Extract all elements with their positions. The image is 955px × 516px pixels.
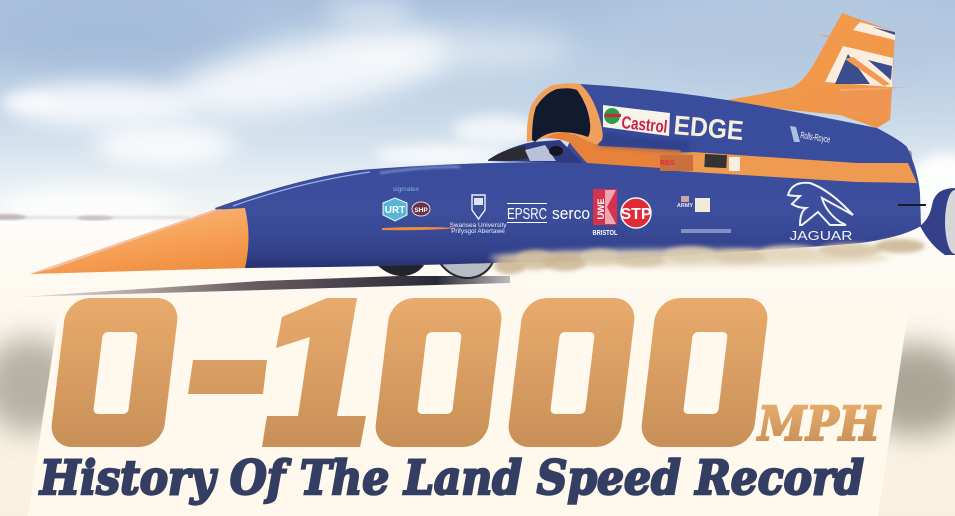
Castrol badge: Castrol (621, 112, 668, 137)
EPSRC logo: EPSRC (507, 206, 547, 223)
pod lower shading (597, 132, 690, 152)
EPSRC logo (507, 203, 547, 223)
Castrol badge (603, 105, 670, 137)
digit 1: 1 (248, 230, 382, 498)
distant mountains (0, 214, 190, 220)
SHP logo: SHP (414, 207, 428, 214)
hyphen: - (191, 242, 265, 488)
digit 0: 0 (377, 253, 499, 499)
car shadow on ground (20, 276, 510, 297)
intake rim (527, 83, 603, 145)
rear suspension and wheel (898, 188, 955, 255)
title: 0-1000 (52, 298, 768, 447)
digit 0 (642, 298, 768, 447)
small sponsor logos (677, 196, 731, 233)
Rolls-Royce logo (790, 126, 831, 146)
clouds (0, 0, 955, 223)
digit 0 (376, 298, 502, 447)
UWE Bristol logo: UWE (596, 198, 606, 220)
intake opening (532, 88, 590, 142)
serco logo: serco (552, 204, 590, 223)
STP logo (620, 198, 652, 228)
cream title panel (28, 298, 909, 516)
stripe sponsors: RBS (660, 160, 675, 167)
nozzle (902, 150, 912, 170)
cockpit canopy (488, 140, 583, 163)
sigmatex logo: sigmatex (393, 186, 420, 193)
Swansea University logo (449, 195, 507, 235)
Swansea University logo: Prifysgol Abertawe (451, 228, 505, 235)
digit 0: 0 (510, 253, 632, 499)
orange under-duct (545, 132, 690, 170)
UWE Bristol logo (592, 189, 618, 237)
digit 0: 0 (44, 253, 166, 499)
wheels (377, 262, 493, 278)
orange stripe (660, 152, 917, 183)
SHP logo (412, 202, 430, 216)
URT logo (383, 198, 407, 221)
body highlight (233, 172, 370, 206)
UWE Bristol logo: BRISTOL (592, 228, 618, 237)
orange side line (382, 227, 460, 230)
Rolls-Royce logo: Rolls-Royce (800, 130, 831, 146)
EDGE logo: EDGE (672, 110, 745, 146)
URT logo: URT (385, 205, 405, 216)
digit 0 (52, 298, 178, 447)
small sponsor logos: ARMY (677, 203, 693, 209)
Jaguar logo (788, 183, 853, 243)
STP logo: STP (620, 206, 652, 223)
blue body (215, 84, 921, 268)
Jaguar logo: JAGUAR (790, 228, 852, 243)
sky background (0, 0, 955, 225)
dust cloud (490, 239, 925, 274)
digit 0 (508, 298, 634, 447)
MPH label: MPH (756, 397, 881, 452)
subtitle: History Of The Land Speed Record (38, 451, 864, 506)
Bloodhound car (30, 13, 955, 278)
stripe sponsors (660, 154, 740, 171)
orange nose cone (30, 208, 248, 274)
salt flat ground (0, 221, 955, 516)
digit 0: 0 (643, 253, 765, 499)
Swansea University logo: Swansea University (449, 222, 507, 229)
grey side shadows (0, 337, 955, 436)
rear fin (727, 13, 907, 128)
